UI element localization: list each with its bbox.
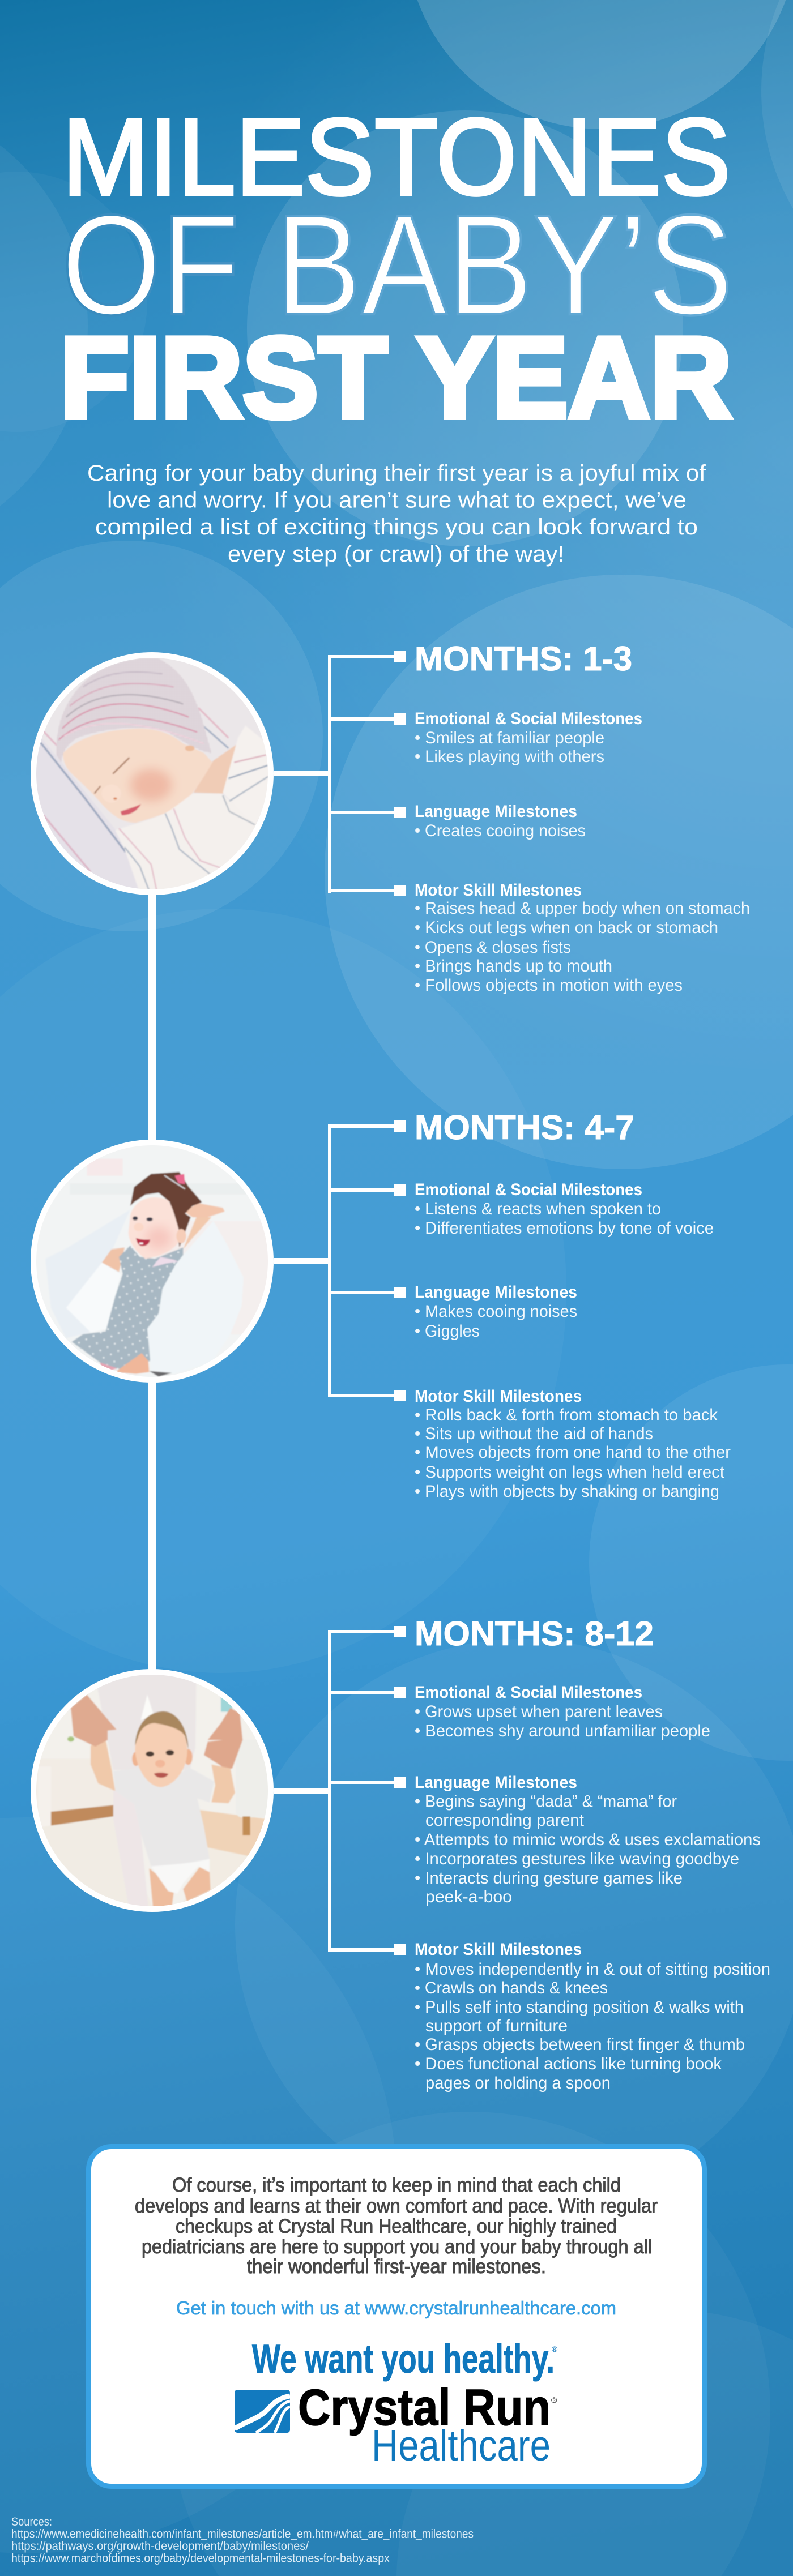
- motor skill milestones 8-12: [415, 1940, 770, 2093]
- section: months 8-12: [415, 1615, 770, 2093]
- language milestones 1-3: Language Milestones: [415, 802, 577, 821]
- title line: FIRST YEAR: FIRST YEAR: [60, 314, 732, 442]
- emotional and social milestones 8-12: • Grows upset when parent leaves: [415, 1702, 663, 1721]
- motor skill milestones 8-12: support of furniture: [425, 2017, 568, 2035]
- emotional and social milestones 8-12: Emotional & Social Milestones: [415, 1683, 642, 1702]
- language milestones 8-12: corresponding parent: [425, 1811, 585, 1830]
- language milestones 8-12: Language Milestones: [415, 1773, 577, 1792]
- motor skill milestones 4-7: [415, 1387, 731, 1501]
- heading: months 4-7: MONTHS: 4-7: [415, 1109, 634, 1146]
- closing paragraph: develops and learns at their own comfort and pace. With regular: [135, 2195, 658, 2217]
- emotional and social milestones 1-3: Emotional & Social Milestones: [415, 709, 642, 728]
- sources: https://www.marchofdimes.org/baby/developmental-milestones-for-baby.aspx: [11, 2552, 390, 2565]
- emotional and social milestones 8-12: • Becomes shy around unfamiliar people: [415, 1722, 710, 1740]
- language milestones 4-7: • Giggles: [415, 1322, 480, 1341]
- motor skill milestones 4-7: • Rolls back & forth from stomach to back: [415, 1406, 718, 1424]
- logo wordmark: Crystal Run Healthcare: Healthcare: [372, 2421, 551, 2470]
- title line: MILESTONES: MILESTONES: [62, 95, 731, 217]
- panel: closing card: [88, 2147, 705, 2487]
- section: months 4-7: [415, 1109, 731, 1501]
- connector: months 4-7 tree: [274, 1120, 406, 1401]
- sources: https://www.emedicinehealth.com/infant_milestones/article_em.htm#what_are_infant_milestones: [11, 2527, 474, 2541]
- motor skill milestones 4-7: Motor Skill Milestones: [415, 1387, 582, 1406]
- intro paragraph: [87, 461, 706, 567]
- emotional and social milestones 4-7: Emotional & Social Milestones: [415, 1180, 642, 1199]
- motor skill milestones 1-3: • Kicks out legs when on back or stomach: [415, 918, 718, 937]
- motor skill milestones 8-12: • Pulls self into standing position & walks with: [415, 1998, 744, 2017]
- photo: smiling baby in white sheet: [31, 1140, 274, 1383]
- logo wordmark: Crystal Run Healthcare: Crystal Run: [298, 2380, 551, 2436]
- language milestones 8-12: [415, 1773, 761, 1906]
- motor skill milestones 8-12: • Grasps objects between first finger & thumb: [415, 2035, 745, 2054]
- intro paragraph: every step (or crawl) of the way!: [228, 542, 564, 567]
- motor skill milestones 8-12: • Crawls on hands & knees: [415, 1979, 608, 1997]
- motor skill milestones 8-12: Motor Skill Milestones: [415, 1940, 582, 1959]
- logo icon: [235, 2390, 290, 2433]
- emotional and social milestones 4-7: [415, 1180, 714, 1238]
- closing paragraph: pediatricians are here to support you and your baby through all: [142, 2236, 652, 2258]
- language milestones 8-12: • Interacts during gesture games like: [415, 1869, 683, 1888]
- motor skill milestones 4-7: • Supports weight on legs when held erect: [415, 1463, 725, 1482]
- timeline spine: [148, 892, 156, 1672]
- sources: https://pathways.org/growth-development/baby/milestones/: [11, 2540, 309, 2553]
- language milestones 4-7: Language Milestones: [415, 1283, 577, 1302]
- title line: OF BABY'S: OF BABY’S: [61, 186, 733, 345]
- motor skill milestones 8-12: pages or holding a spoon: [425, 2074, 611, 2093]
- tagline: We want you healthy: ®: [552, 2344, 558, 2354]
- motor skill milestones 4-7: • Moves objects from one hand to the other: [415, 1443, 731, 1462]
- contact link: Get in touch with us at www.crystalrunhealthcare.com: [176, 2297, 616, 2318]
- emotional and social milestones 1-3: • Smiles at familiar people: [415, 729, 604, 747]
- motor skill milestones 1-3: [415, 881, 750, 995]
- emotional and social milestones 1-3: • Likes playing with others: [415, 747, 604, 766]
- emotional and social milestones 4-7: • Differentiates emotions by tone of voice: [415, 1219, 714, 1238]
- language milestones 8-12: • Begins saying “dada” & “mama” for: [415, 1792, 677, 1811]
- motor skill milestones 1-3: • Brings hands up to mouth: [415, 957, 612, 975]
- motor skill milestones 1-3: Motor Skill Milestones: [415, 881, 582, 900]
- logo wordmark: Crystal Run Healthcare: ®: [551, 2395, 557, 2404]
- closing paragraph: their wonderful first-year milestones.: [247, 2256, 546, 2278]
- intro paragraph: compiled a list of exciting things you can look forward to: [95, 515, 698, 540]
- emotional and social milestones 1-3: [415, 709, 642, 766]
- heading: months 1-3: MONTHS: 1-3: [415, 640, 632, 678]
- emotional and social milestones 8-12: [415, 1683, 710, 1740]
- language milestones 4-7: [415, 1283, 577, 1341]
- emotional and social milestones 4-7: • Listens & reacts when spoken to: [415, 1200, 661, 1218]
- language milestones 1-3: • Creates cooing noises: [415, 821, 586, 840]
- language milestones 8-12: • Attempts to mimic words & uses exclamations: [415, 1830, 761, 1849]
- language milestones 4-7: • Makes cooing noises: [415, 1302, 577, 1321]
- sources: [11, 2515, 474, 2565]
- motor skill milestones 4-7: • Plays with objects by shaking or banging: [415, 1482, 719, 1501]
- language milestones 8-12: • Incorporates gestures like waving goodbye: [415, 1850, 739, 1868]
- photo: baby learning to walk: [31, 1669, 274, 1912]
- intro paragraph: love and worry. If you aren’t sure what to expect, we’ve: [107, 488, 687, 513]
- tagline: We want you healthy: We want you healthy.: [252, 2337, 555, 2382]
- closing paragraph: Of course, it’s important to keep in mind that each child: [172, 2174, 621, 2196]
- motor skill milestones 8-12: • Moves independently in & out of sitting position: [415, 1960, 770, 1979]
- closing paragraph: [135, 2174, 658, 2278]
- motor skill milestones 4-7: • Sits up without the aid of hands: [415, 1424, 653, 1443]
- connector: months 1-3 tree: [274, 651, 406, 896]
- logo wordmark: Crystal Run Healthcare: [298, 2380, 557, 2470]
- language milestones 8-12: peek-a-boo: [425, 1888, 512, 1906]
- motor skill milestones 1-3: • Raises head & upper body when on stomach: [415, 899, 750, 918]
- title: [60, 95, 733, 442]
- motor skill milestones 8-12: • Does functional actions like turning book: [415, 2055, 722, 2073]
- intro paragraph: Caring for your baby during their first year is a joyful mix of: [87, 461, 706, 486]
- connector: months 8-12 tree: [274, 1626, 406, 1955]
- motor skill milestones 1-3: • Follows objects in motion with eyes: [415, 976, 683, 995]
- motor skill milestones 1-3: • Opens & closes fists: [415, 938, 571, 957]
- photo: sleeping newborn: [31, 652, 274, 895]
- section: months 1-3: [415, 640, 750, 995]
- heading: months 8-12: MONTHS: 8-12: [415, 1615, 654, 1653]
- language milestones 1-3: [415, 802, 586, 840]
- sources: Sources:: [11, 2515, 52, 2528]
- closing paragraph: checkups at Crystal Run Healthcare, our highly trained: [176, 2215, 617, 2237]
